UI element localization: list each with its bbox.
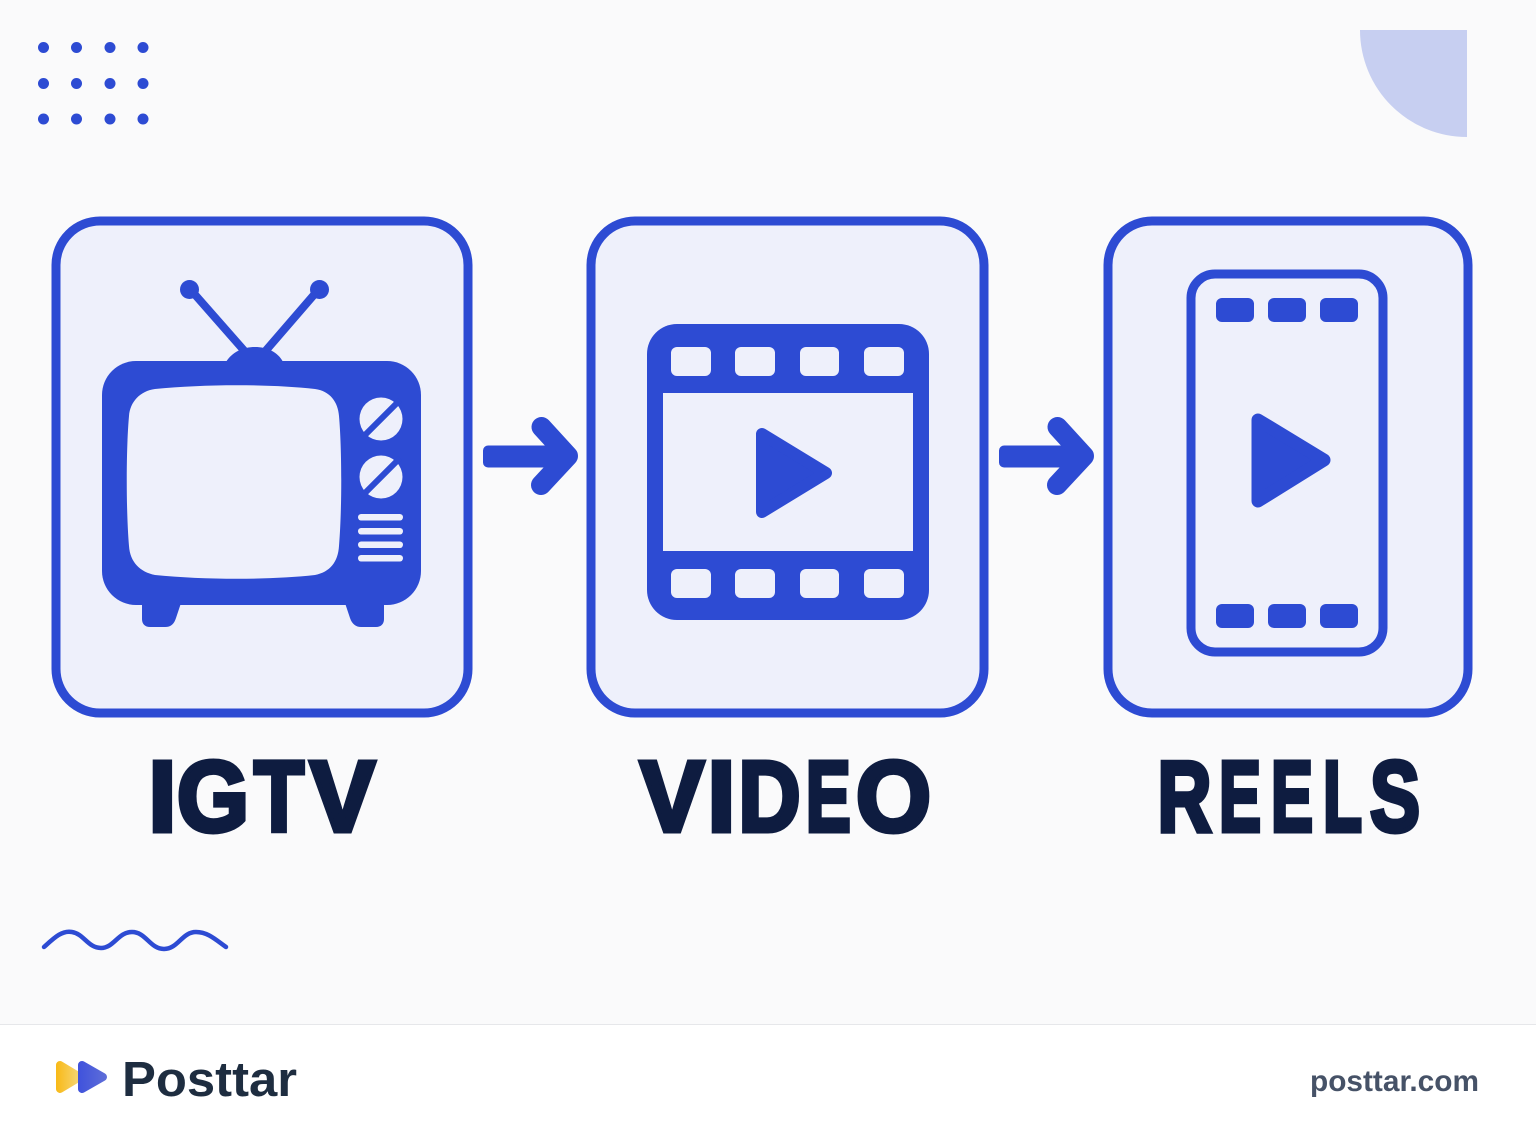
heading: VIDEO: V <box>640 741 704 853</box>
heading: VIDEO: D <box>738 741 800 853</box>
icon: vertical phone film with play <box>1191 274 1383 652</box>
icon: television <box>102 280 421 627</box>
heading: REELS: S <box>1370 741 1420 853</box>
heading: IGTV: I <box>148 741 176 853</box>
panel: Video <box>591 221 984 713</box>
panel: Reels <box>1108 221 1468 713</box>
heading: IGTV: V <box>310 741 375 853</box>
icon: film strip with play <box>647 324 929 620</box>
brand name: Posttar <box>122 1053 297 1107</box>
heading: VIDEO: I <box>708 741 735 853</box>
website url: posttar.com <box>1310 1065 1479 1098</box>
decorative wave <box>44 932 226 949</box>
heading: IGTV: T <box>254 741 304 853</box>
heading: IGTV: G <box>177 741 249 853</box>
logo icon <box>60 1065 103 1089</box>
heading: REELS: E <box>1271 741 1313 853</box>
heading: REELS: R <box>1158 741 1212 853</box>
heading: VIDEO: O <box>856 741 931 853</box>
footer bar <box>0 1024 1536 1136</box>
heading: VIDEO: E <box>806 741 851 853</box>
decorative dot grid <box>38 42 148 124</box>
arrow: Video to Reels <box>999 427 1084 485</box>
heading: REELS: E <box>1219 741 1261 853</box>
decorative quarter circle <box>1360 30 1467 137</box>
arrow: IGTV to Video <box>483 427 568 485</box>
heading: REELS: L <box>1323 741 1362 853</box>
panel: IGTV <box>56 221 468 713</box>
